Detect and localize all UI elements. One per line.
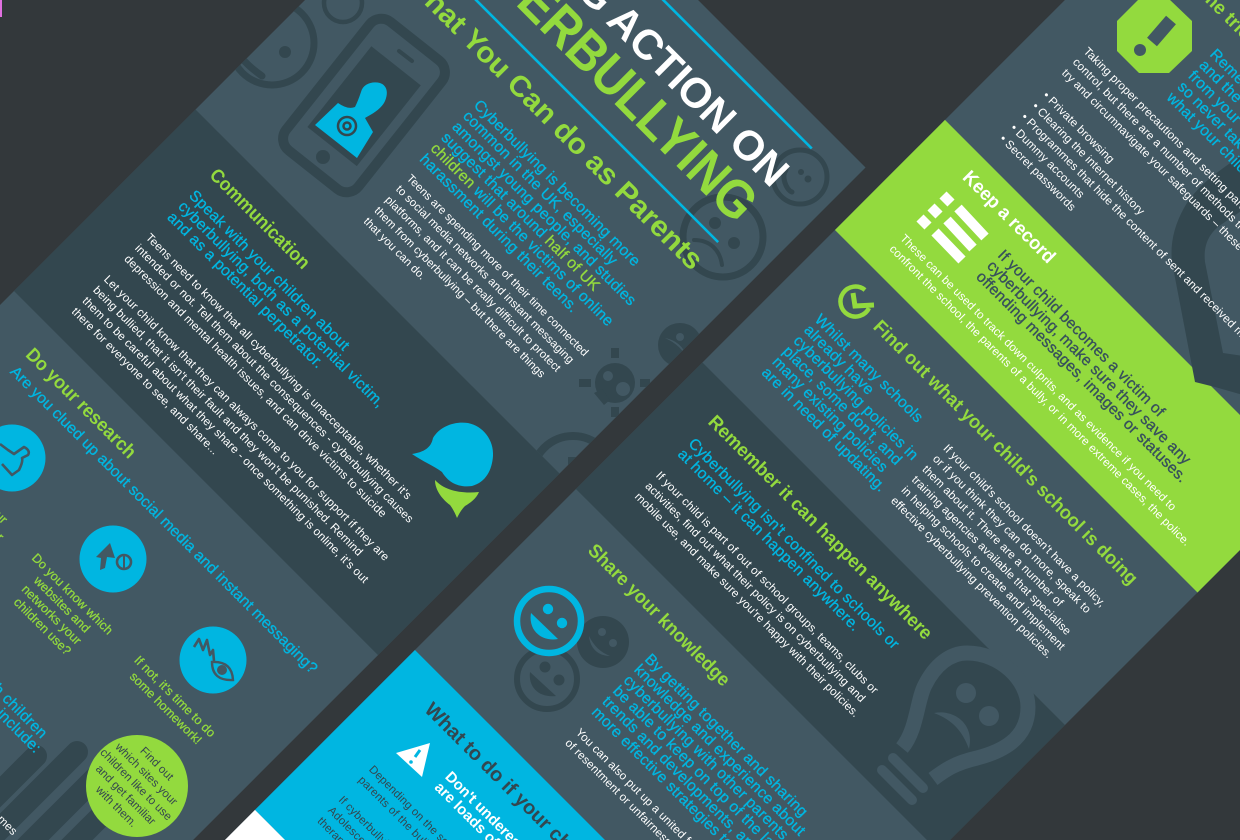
intro text: Cyberbullying is becoming more: [470, 97, 643, 270]
research questions: some homework!: [127, 669, 205, 747]
panel: keep a record: offending messages, images or statuses.: [973, 268, 1190, 486]
panel: tricks: • Dummy accounts: [1008, 122, 1087, 201]
panel: communication: being bullied, that it isn't their fault and they won't be punished. Remind: [90, 284, 365, 559]
panel: communication: [14, 110, 560, 655]
intro text: [358, 97, 665, 404]
panel: find out what your child's school is doing: place, some don't, and: [779, 343, 905, 469]
panel: find out what your child's school is doing: training agencies available that specialise: [909, 473, 1074, 638]
panel: communication: and as a potential perpetrator.: [164, 209, 327, 372]
callout: green circle: and get familiar: [93, 762, 158, 828]
panel: keep a record: These can be used to track down culprits, and as evidence if you need to: [897, 232, 1179, 514]
callout: green circle: which sites your: [112, 740, 180, 808]
panel: communication: there for everyone to see, and share...: [69, 305, 221, 458]
intro text: platforms, and it can be really difficult to protect: [382, 194, 563, 375]
panel: do your research: Are you clued up about social media and instant messaging?: [7, 363, 321, 677]
panel: find out what your child's school is doing: If your child's school doesn't have a policy,: [940, 442, 1108, 610]
intro text: children will be the victims of online: [427, 140, 617, 330]
research questions: Do you know which: [29, 551, 116, 637]
research questions: networks your: [19, 582, 84, 648]
tools list: [0, 598, 84, 838]
icon: list: [920, 195, 985, 260]
panel: find out what your child's school is doing: Whilst many schools: [811, 311, 926, 426]
icon circle: thumbs up: [0, 424, 46, 492]
icon circle: pulse and eye: [180, 626, 246, 694]
panel: share your knowledge: [478, 540, 888, 840]
panel: tricks: • Clearing the internet history: [1029, 100, 1147, 218]
panel: communication: Speak with your children about: [185, 187, 353, 355]
callout: green circle: Find out: [137, 744, 177, 784]
panel: share your knowledge: Share your knowledge: [583, 540, 734, 691]
panel: communication: depression and mental health issues, and can drive victims to suicide: [121, 253, 389, 520]
panel: remember it can happen anywhere: Cyberbullying isn't confined to schools or: [685, 435, 903, 653]
panel: find out what your child's school is doing: already have: [800, 322, 877, 399]
research questions: websites and: [30, 573, 93, 635]
panel: communication: Communication: [205, 165, 314, 274]
panel: find out what your child's school is doing: in helping schools to create and implement: [899, 484, 1068, 653]
panel: tricks: [995, 0, 1240, 395]
panel: find out what your child's school is doing: effective cyberbullying prevention policies.: [888, 494, 1055, 661]
panel: keep a record: cyberbullying, make sure they save any: [983, 258, 1194, 468]
background smileys top left page: [236, 0, 830, 464]
icon: smileys: [517, 589, 629, 709]
panel: communication: them to be careful about what they share - once something is online, it's out: [80, 294, 372, 586]
panel: communication: cyberbullying, both as a potential victim,: [175, 198, 388, 411]
intro text: suggest that around half of UK: [438, 129, 603, 295]
panel: find out what your child's school is doing: or if you think they can do more, speak to: [930, 452, 1094, 616]
intro text: that you can do.: [361, 216, 428, 283]
panel: share your knowledge: knowledge and experience about: [631, 661, 809, 840]
icon: sad light bulb: [882, 653, 1028, 800]
panel: find out what your child's school is doing: [758, 284, 1142, 667]
panel: remember it can happen anywhere: [576, 362, 1065, 840]
panel: remember it can happen anywhere: mobile use, and make sure you're happy with their policies.: [632, 490, 862, 720]
panel: keep a record: confront the school, the parents of a bully, or in more extreme cases, the police.: [887, 243, 1193, 549]
panel: find out what your child's school is doing: Find out what your child's school is doing: [869, 316, 1142, 589]
intro text: harassment during their teens.: [416, 151, 581, 316]
icon: speech bubbles: [412, 423, 493, 518]
panel: left page background: [0, 0, 866, 840]
intro text: common in the UK, especially: [459, 108, 621, 269]
panel: tricks: • Secret passwords: [997, 132, 1078, 214]
panel: keep a record: [835, 120, 1240, 592]
panel: what to do if your child is a victim: [43, 650, 777, 840]
panel: find out what your child's school is doing: many existing policies: [769, 354, 891, 476]
intro text: them from cyberbullying – but there are things: [372, 205, 547, 381]
callout: green circle: with them.: [92, 783, 140, 830]
panel: find out what your child's school is doing: them about it. There are a number of: [920, 463, 1066, 610]
panel: communication: Teens need to know that all cyberbullying is unacceptable, whether it's: [143, 231, 414, 502]
panel: do your research: [0, 344, 339, 840]
research questions: [0, 445, 224, 774]
callout: green circle: [77, 725, 198, 840]
panel: keep a record: Keep a record: [958, 167, 1059, 268]
panel: remember it can happen anywhere: Remember it can happen anywhere: [704, 412, 936, 644]
panel: communication: intended or not. Tell them about the consequences - cyberbullying causes: [132, 242, 416, 526]
research questions: children use?: [11, 595, 74, 658]
research questions: If not, it's time to do: [131, 653, 218, 740]
icon: shield outline: [1172, 150, 1240, 397]
intro text: Teens are spending more of their time connected: [404, 173, 590, 359]
panel: tricks: • Private browsing: [1040, 89, 1117, 166]
panel: remember it can happen anywhere: activities, find out what their policy is on cyberbullying and: [643, 480, 868, 705]
intro text: to social media networks and instant messaging: [393, 183, 576, 366]
icon: hand: [0, 752, 121, 840]
panel: find out what your child's school is doing: are in need of updating.: [758, 364, 889, 496]
icon: warning triangle: [396, 743, 430, 777]
panel: find out what your child's school is doing: cyberbullying policies in: [790, 332, 921, 464]
panel: share your knowledge: By getting together and sharing: [641, 651, 811, 821]
icon: warning octagon: [1117, 0, 1192, 73]
panel: remember it can happen anywhere: If your child is part of out of school groups, teams, clubs or: [653, 469, 881, 697]
panel: remember it can happen anywhere: at home – it can happen anywhere.: [674, 446, 863, 635]
callout: green circle: children like to use: [97, 746, 175, 823]
intro text: amongst young people, and studies: [449, 118, 639, 309]
icon circle: cursor: [80, 526, 146, 592]
panel: keep a record: If your child becomes a victim of: [994, 247, 1168, 421]
panel: communication: Let your child know that they can always come to you for support if they are: [101, 273, 392, 564]
panel: do your research: Do your research: [21, 344, 140, 463]
icon: green check clock: [840, 287, 874, 317]
icon: phone with targeted person: [277, 13, 451, 198]
